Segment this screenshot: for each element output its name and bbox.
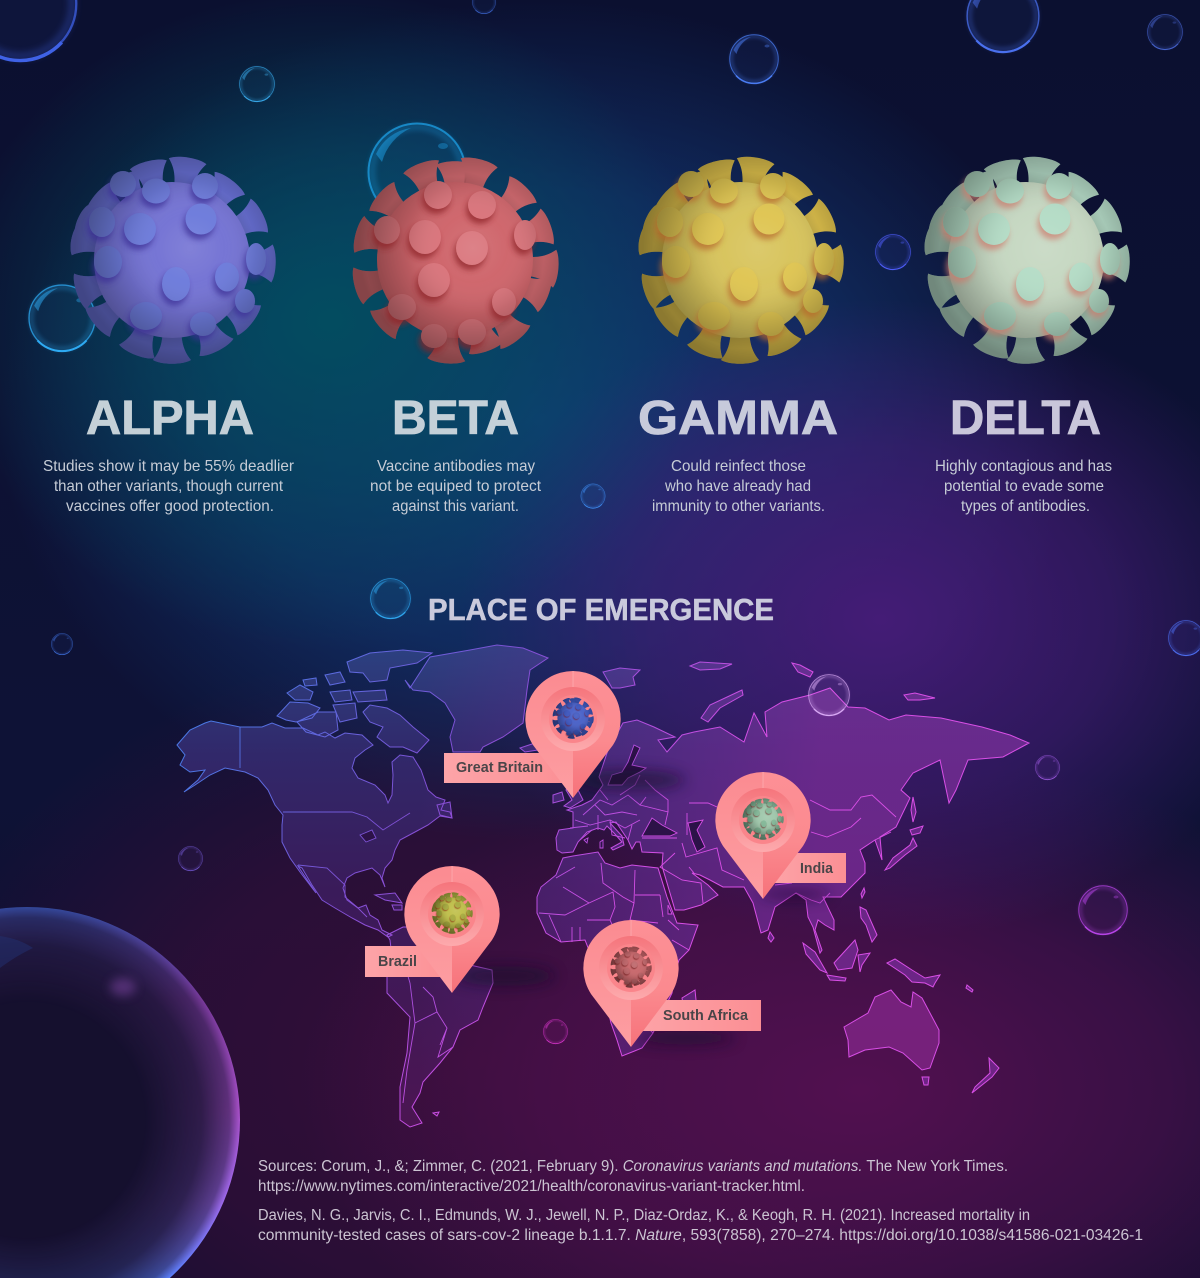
- icon: red virus: [609, 945, 653, 989]
- label: south africa: [632, 1000, 761, 1031]
- sources: Sources: Corum, J., &; Zimmer, C. (2021, February 9). Coronavirus variants and mutations. The New York Times.: [258, 1158, 1008, 1175]
- description: gamma: immunity to other variants.: [652, 498, 825, 515]
- description: beta: [370, 458, 542, 515]
- description: delta: [935, 458, 1112, 515]
- icon: olive virus: [430, 891, 474, 935]
- description: gamma: who have already had: [664, 478, 811, 495]
- sources: [258, 1158, 1143, 1244]
- decorative bubbles top row: [0, 0, 1182, 508]
- heading: gamma: GAMMA: [638, 392, 838, 445]
- description: beta: Vaccine antibodies may: [377, 458, 535, 475]
- icon: gamma virus: [630, 150, 850, 370]
- icon: alpha virus: [62, 150, 282, 370]
- pin: india: [715, 772, 846, 899]
- description: beta: against this variant.: [392, 498, 519, 515]
- description: delta: Highly contagious and has: [935, 458, 1112, 475]
- description: beta: not be equiped to protect: [370, 478, 542, 495]
- pin: great britain: [444, 671, 621, 798]
- description: gamma: Could reinfect those: [671, 458, 806, 475]
- description: alpha: vaccines offer good protection.: [66, 498, 274, 515]
- icon: beta virus: [345, 150, 565, 370]
- label: brazil: Brazil: [378, 954, 417, 970]
- icon: blue virus: [551, 696, 595, 740]
- description: alpha: [43, 458, 294, 515]
- world map: [177, 645, 1029, 1127]
- panel: gamma: [630, 150, 850, 515]
- label: great britain: [444, 753, 574, 783]
- panel: alpha: [43, 150, 294, 515]
- icon: green virus: [741, 797, 785, 841]
- heading: delta: DELTA: [950, 392, 1101, 445]
- pin: south africa: [583, 920, 761, 1047]
- heading: place of emergence: PLACE OF EMERGENCE: [428, 593, 774, 627]
- pin shadows: [455, 770, 831, 1045]
- sources: community-tested cases of sars-cov-2 lineage b.1.1.7. Nature, 593(7858), 270–274. https://doi.org/10.1038/s41586-021-03426-1: [258, 1227, 1143, 1244]
- label: india: India: [800, 861, 834, 877]
- sources: https://www.nytimes.com/interactive/2021/health/coronavirus-variant-tracker.html.: [258, 1178, 805, 1195]
- description: gamma: [652, 458, 825, 515]
- label: south africa: South Africa: [663, 1008, 749, 1024]
- description: alpha: Studies show it may be 55% deadlier: [43, 458, 294, 475]
- description: alpha: than other variants, though current: [54, 478, 284, 495]
- large bubble bottom left: [0, 907, 240, 1278]
- icon: delta virus: [916, 150, 1136, 370]
- description: delta: types of antibodies.: [961, 498, 1090, 515]
- heading: beta: BETA: [392, 392, 519, 445]
- label: great britain: Great Britain: [456, 760, 543, 776]
- pin: brazil: [365, 866, 500, 993]
- panel: delta: [916, 150, 1136, 515]
- panel: beta: [345, 150, 565, 515]
- sources: Davies, N. G., Jarvis, C. I., Edmunds, W. J., Jewell, N. P., Diaz-Ordaz, K., & Keogh, R. H. (2021). Increased mortality in: [258, 1207, 1030, 1224]
- heading: alpha: ALPHA: [86, 392, 254, 445]
- bubbles over map: [51, 579, 1200, 1044]
- description: delta: potential to evade some: [944, 478, 1104, 495]
